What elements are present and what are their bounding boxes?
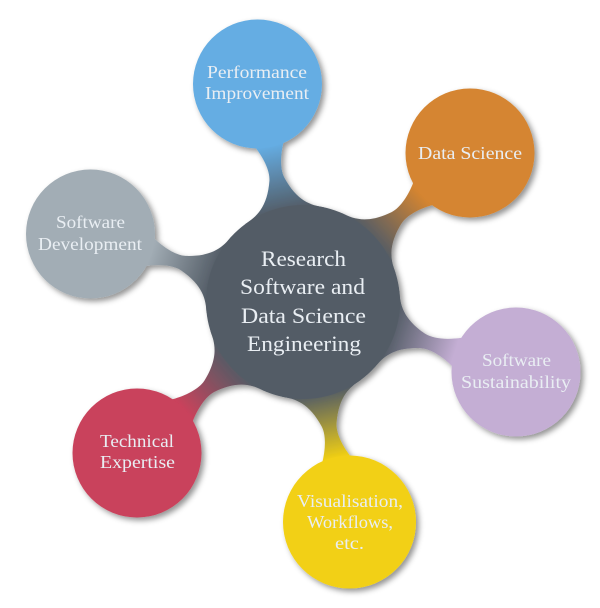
- connector: centre to Technical Expertise: [139, 312, 285, 456]
- node circle: Software Sustainability: [452, 308, 580, 436]
- central node circle: [206, 205, 400, 399]
- central label: Data Science: [241, 303, 366, 328]
- node circle: Technical Expertise: [72, 388, 202, 518]
- label: Software Development: Software: [56, 212, 125, 232]
- label: Visualisation, Workflows, etc.: Workflows,: [307, 512, 393, 532]
- connector: centre to Visualisation: [276, 352, 381, 491]
- label: Technical Expertise: Expertise: [100, 452, 175, 472]
- central label: Engineering: [247, 331, 361, 356]
- node circle: Performance Improvement: [193, 20, 322, 148]
- node circle: Data Science: [406, 88, 534, 218]
- label: Visualisation, Workflows, etc.: [297, 491, 403, 553]
- central label: [240, 246, 366, 356]
- label: Performance Improvement: [205, 62, 309, 103]
- connector: centre to Software Development: [115, 207, 258, 322]
- label: Software Development: [38, 212, 142, 254]
- connector: centre to Data Science: [321, 148, 467, 292]
- label: Software Development: Development: [38, 234, 142, 254]
- label: Data Science: Data Science: [418, 143, 522, 163]
- connector: centre to Performance Improvement: [225, 113, 330, 252]
- label: Visualisation, Workflows, etc.: Visualisation,: [297, 491, 403, 511]
- label: Performance Improvement: Improvement: [205, 83, 309, 103]
- label: Technical Expertise: [100, 431, 175, 472]
- label: Performance Improvement: Performance: [207, 62, 307, 82]
- node circle: Visualisation, Workflows, etc.: [283, 456, 416, 588]
- label: Software Sustainability: [461, 350, 571, 392]
- label: Software Sustainability: Sustainability: [461, 372, 571, 392]
- node circle: Software Development: [26, 170, 155, 298]
- label: Technical Expertise: Technical: [100, 431, 174, 451]
- label: Visualisation, Workflows, etc.: etc.: [335, 533, 364, 553]
- central label: Research: [261, 246, 346, 271]
- connector: centre to Software Sustainability: [348, 282, 491, 397]
- label: Software Sustainability: Software: [482, 350, 551, 370]
- central label: Software and: [240, 274, 365, 299]
